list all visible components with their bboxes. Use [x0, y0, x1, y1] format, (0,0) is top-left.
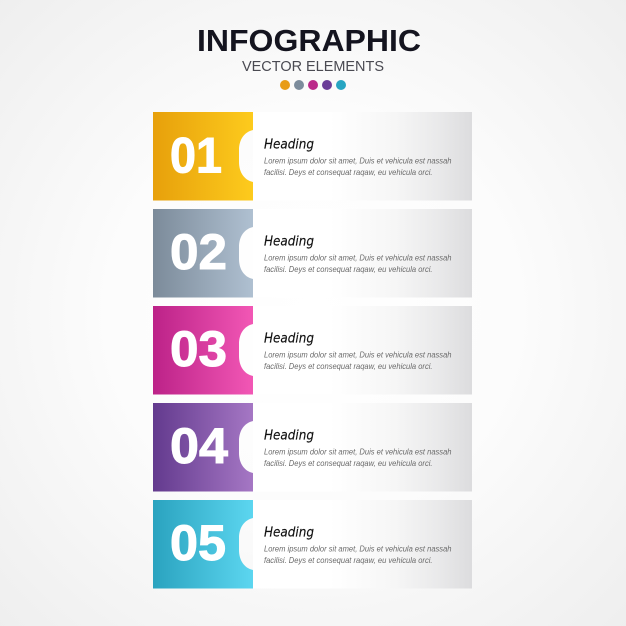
body text	[264, 544, 452, 565]
body text: Lorem ipsum dolor sit amet, Duis et vehicula est nassah	[264, 252, 452, 262]
body text: Lorem ipsum dolor sit amet, Duis et vehicula est nassah	[264, 544, 452, 554]
panel: item 02	[153, 209, 472, 298]
text background	[253, 112, 472, 200]
title: INFOGRAPHIC	[197, 23, 421, 58]
body text	[264, 446, 452, 468]
panel: item 03	[153, 306, 472, 394]
heading: Heading	[264, 136, 314, 152]
number: 05	[170, 515, 226, 571]
number: 04	[170, 418, 228, 474]
body text: Lorem ipsum dolor sit amet, Duis et vehicula est nassah	[264, 446, 452, 456]
body text: Lorem ipsum dolor sit amet, Duis et vehicula est nassah	[264, 350, 452, 360]
number tab with notch	[153, 112, 253, 200]
number tab with notch	[153, 403, 253, 492]
number: 03	[170, 321, 227, 377]
panel: item 01	[153, 112, 472, 200]
text background	[253, 500, 472, 588]
body text: facilisi. Deys et consequat raqaw, eu vehicula orci.	[264, 361, 432, 371]
title block	[197, 23, 421, 90]
number: 01	[170, 128, 222, 184]
number tab with notch	[153, 500, 253, 588]
number tab with notch	[153, 306, 253, 394]
heading: Heading	[264, 524, 314, 540]
body text: facilisi. Deys et consequat raqaw, eu vehicula orci.	[264, 167, 432, 177]
text background	[253, 403, 472, 492]
heading: Heading	[264, 428, 314, 444]
number: 02	[170, 224, 227, 280]
body text	[264, 252, 452, 274]
body text	[264, 350, 452, 371]
heading: Heading	[264, 234, 314, 250]
heading: Heading	[264, 330, 314, 346]
body text: facilisi. Deys et consequat raqaw, eu vehicula orci.	[264, 264, 432, 274]
text background	[253, 209, 472, 298]
text background	[253, 306, 472, 394]
body text: Lorem ipsum dolor sit amet, Duis et vehicula est nassah	[264, 156, 452, 166]
body text: facilisi. Deys et consequat raqaw, eu vehicula orci.	[264, 458, 432, 468]
body text	[264, 156, 452, 177]
panel: item 05	[153, 500, 472, 588]
panel: item 04	[153, 403, 472, 492]
subtitle: VECTOR ELEMENTS	[242, 58, 384, 75]
colour dots	[280, 80, 346, 90]
number tab with notch	[153, 209, 253, 298]
body text: facilisi. Deys et consequat raqaw, eu vehicula orci.	[264, 555, 432, 565]
